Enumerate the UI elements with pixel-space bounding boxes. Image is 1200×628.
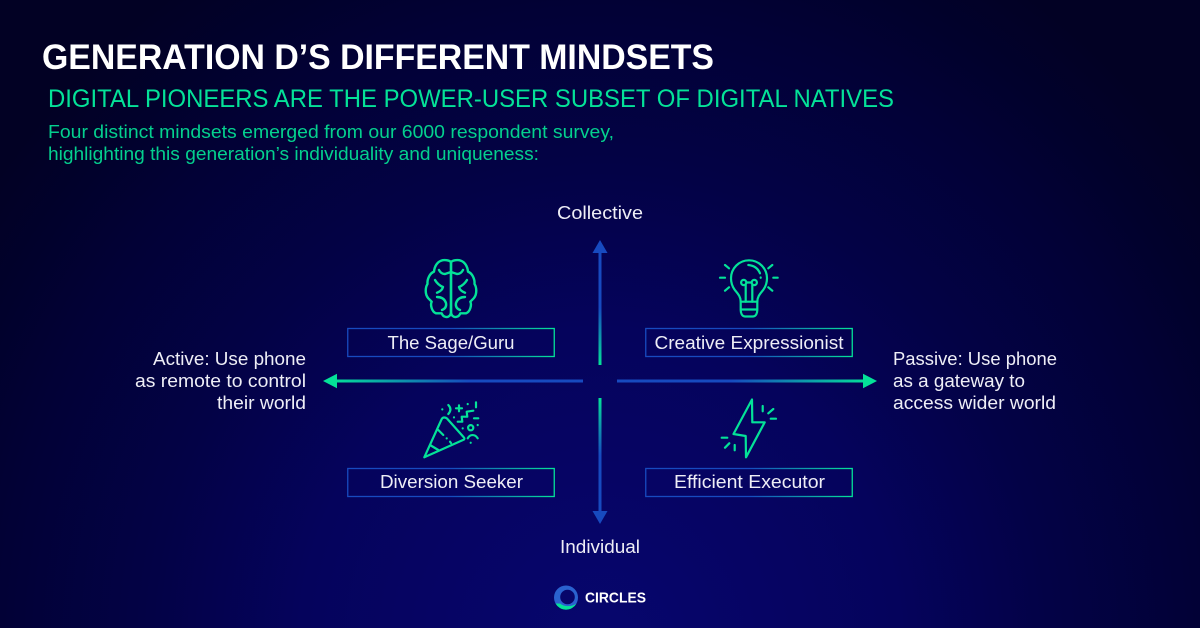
intro text: highlighting this generation’s individuality and uniqueness: (48, 143, 539, 164)
axis label: active: their world (217, 393, 306, 413)
box: diversion seeker (348, 468, 554, 496)
arrow: up (592, 240, 608, 365)
box: creative expressionist (646, 328, 852, 356)
icon: brain (426, 260, 476, 317)
axis label: individual: Individual (560, 537, 640, 557)
axis label: passive: Passive: Use phone (893, 349, 1057, 369)
box: efficient executor: Efficient Executor (674, 472, 825, 492)
title: GENERATION D’S DIFFERENT MINDSETS (42, 38, 714, 77)
axis label: passive: access wider world (893, 393, 1056, 413)
box: the sage/guru: The Sage/Guru (388, 333, 514, 353)
intro text: Four distinct mindsets emerged from our 6000 respondent survey, (48, 121, 614, 142)
arrow: right (617, 374, 877, 388)
subtitle: DIGITAL PIONEERS ARE THE POWER-USER SUBSET OF DIGITAL NATIVES (48, 85, 894, 113)
box: diversion seeker: Diversion Seeker (380, 472, 523, 492)
icon: light bulb (720, 260, 778, 316)
intro text (48, 121, 614, 164)
logo: circles: CIRCLES (585, 590, 646, 606)
axis label: passive: as a gateway to (893, 371, 1025, 391)
logo: circles (554, 586, 646, 610)
axis label: passive (893, 349, 1057, 413)
arrow: down (592, 398, 608, 524)
box: efficient executor (646, 468, 852, 496)
arrow: left (323, 374, 583, 388)
box: the sage/guru (348, 328, 554, 356)
axis label: active: as remote to control (135, 371, 306, 391)
axis label: collective: Collective (557, 203, 643, 223)
icon: lightning bolt (722, 400, 776, 457)
icon: party popper (424, 402, 478, 457)
axis label: active: Active: Use phone (153, 349, 306, 369)
axis label: active (135, 349, 306, 413)
box: creative expressionist: Creative Expressionist (654, 333, 844, 353)
